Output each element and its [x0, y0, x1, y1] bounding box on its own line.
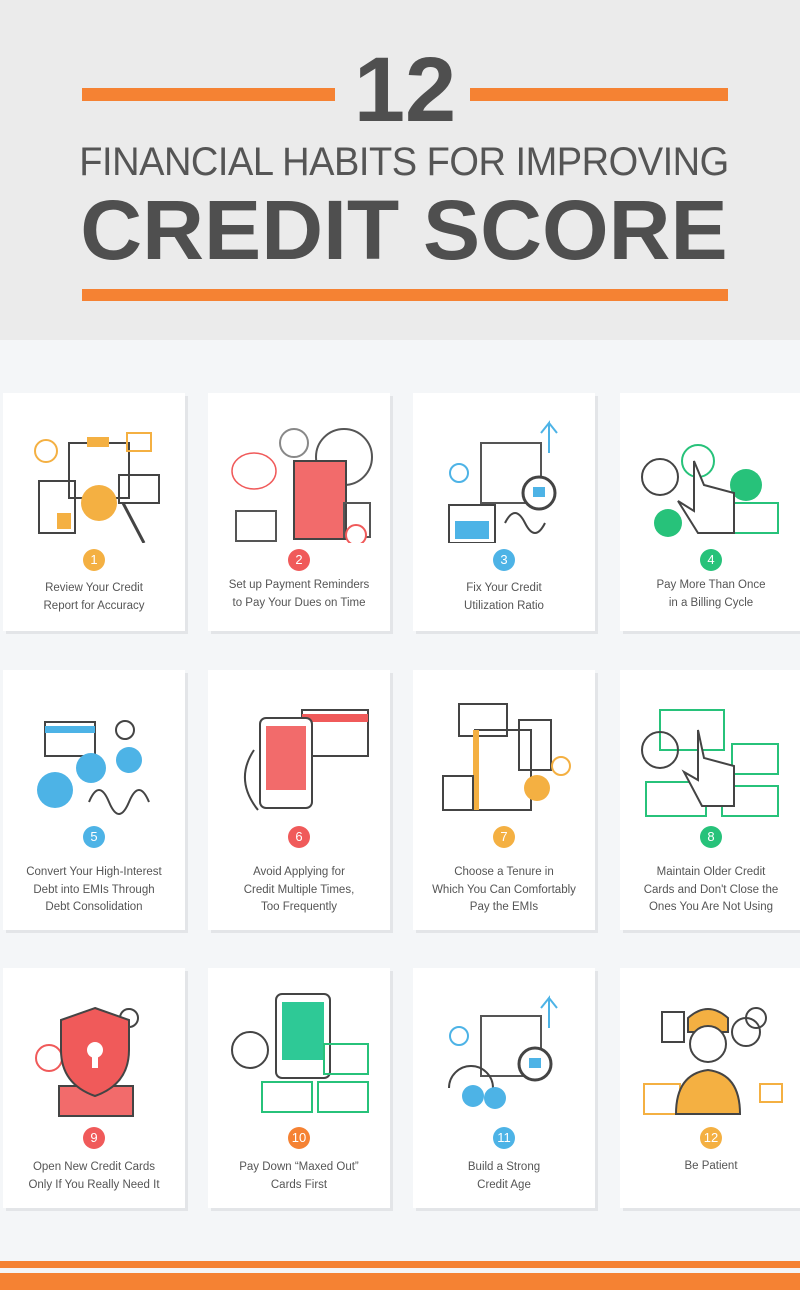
card 4 [620, 393, 800, 631]
icon: tap pay [641, 444, 779, 537]
card 7 [413, 670, 595, 930]
label 2: Set up Payment Reminders [229, 579, 369, 591]
number 8 [700, 826, 722, 848]
label 1: Review Your Credit [45, 582, 143, 594]
number 10 [288, 1127, 310, 1149]
label 4: Pay More Than Once [656, 579, 766, 591]
card 1 [3, 393, 185, 631]
icon: patient person [643, 1007, 783, 1115]
card 11 [413, 968, 595, 1208]
label 6: Avoid Applying for [253, 866, 345, 878]
label 8: Cards and Don't Close the [644, 884, 778, 896]
label 8: Ones You Are Not Using [649, 901, 773, 913]
number 12 [700, 1127, 722, 1149]
orange line left [82, 88, 335, 101]
label 9 [28, 1161, 160, 1190]
header panel [0, 0, 800, 340]
label 4: in a Billing Cycle [669, 596, 753, 608]
number 6 [288, 826, 310, 848]
label 7: Which You Can Comfortably [432, 884, 576, 896]
orange line bottom [82, 289, 728, 301]
card 10 [208, 968, 390, 1208]
card 3 [413, 393, 595, 631]
number 9: 9 [90, 1130, 98, 1145]
label 6: Credit Multiple Times, [244, 884, 354, 896]
label 11: Credit Age [477, 1178, 531, 1190]
label 1 [44, 582, 144, 612]
icon: shield lock [35, 1007, 139, 1117]
label 4 [656, 579, 766, 608]
label 3 [464, 582, 544, 612]
icon: tenure [442, 703, 571, 811]
label 10: Cards First [271, 1178, 327, 1190]
card 8 [620, 670, 800, 930]
number 3 [493, 549, 515, 571]
number 6: 6 [295, 829, 303, 844]
label 2: to Pay Your Dues on Time [233, 596, 365, 608]
number 5: 5 [90, 829, 98, 844]
number 10: 10 [292, 1130, 306, 1145]
number 1 [83, 549, 105, 571]
icon: payment reminders [231, 428, 373, 543]
number 1: 1 [90, 552, 98, 567]
number 7 [493, 826, 515, 848]
label 8: Maintain Older Credit [657, 866, 765, 878]
number 11 [493, 1127, 515, 1149]
label 12: Be Patient [684, 1160, 738, 1172]
label 7: Choose a Tenure in [454, 866, 554, 878]
label 5 [26, 866, 162, 913]
icon: credit age [448, 995, 558, 1109]
label 10 [239, 1161, 359, 1190]
subtitle: FINANCIAL HABITS FOR IMPROVING [79, 140, 729, 184]
number 4 [700, 549, 722, 571]
icon: report review [34, 432, 160, 543]
label 6 [244, 866, 354, 913]
number 3: 3 [500, 552, 508, 567]
card 2 [208, 393, 390, 631]
icon: utilization [448, 420, 558, 543]
icon: EMIs [37, 720, 150, 815]
number 2 [288, 549, 310, 571]
label 3: Utilization Ratio [464, 600, 544, 612]
label 2 [229, 579, 369, 608]
label 11 [468, 1161, 540, 1190]
label 8 [644, 866, 778, 913]
icon: maxed cards [231, 993, 369, 1113]
icon: phone and card [244, 709, 369, 811]
label 1: Report for Accuracy [44, 600, 144, 612]
number 5 [83, 826, 105, 848]
icon: older cards [641, 709, 779, 817]
label 9: Open New Credit Cards [33, 1161, 155, 1173]
card 9 [3, 968, 185, 1208]
main title: CREDIT SCORE [80, 183, 728, 277]
number 8: 8 [707, 829, 715, 844]
footer stripe wide [0, 1273, 800, 1290]
number 7: 7 [500, 829, 508, 844]
label 5: Debt into EMIs Through [33, 884, 155, 896]
number 4: 4 [707, 552, 715, 567]
card 5 [3, 670, 185, 930]
label 11: Build a Strong [468, 1161, 540, 1173]
label 9: Only If You Really Need It [28, 1178, 160, 1190]
label 5: Debt Consolidation [45, 901, 143, 913]
label 7: Pay the EMIs [470, 901, 538, 913]
title number: 12 [354, 39, 456, 141]
label 5: Convert Your High-Interest [26, 866, 162, 878]
footer stripe thin [0, 1261, 800, 1268]
label 7 [432, 866, 576, 913]
card 12 [620, 968, 800, 1208]
number 12: 12 [704, 1130, 718, 1145]
card 6 [208, 670, 390, 930]
label 10: Pay Down “Maxed Out” [239, 1161, 359, 1173]
number 11: 11 [497, 1130, 511, 1145]
orange line right [470, 88, 728, 101]
label 3: Fix Your Credit [466, 582, 542, 594]
label 6: Too Frequently [261, 901, 337, 913]
number 9 [83, 1127, 105, 1149]
number 2: 2 [295, 552, 303, 567]
